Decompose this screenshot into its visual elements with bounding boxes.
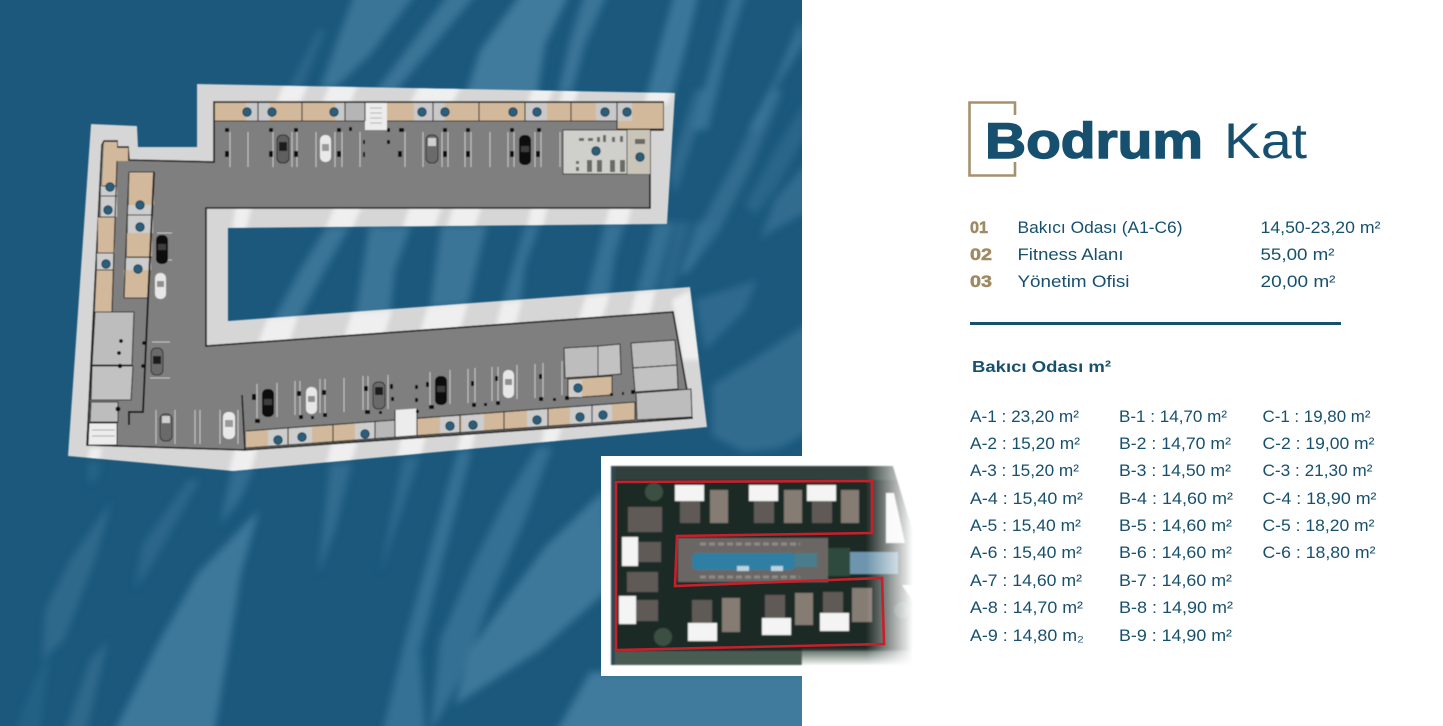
room areas column C xyxy=(1262,408,1377,562)
aerial trees xyxy=(645,483,910,646)
row 02 xyxy=(970,245,1335,264)
title second word: Kat xyxy=(1224,113,1307,169)
row 01: Bakıcı Odası (A1-C6) xyxy=(1018,218,1182,237)
row 01 xyxy=(970,218,1381,237)
lower arm parking lines xyxy=(257,361,562,418)
row 01: 01 xyxy=(970,218,988,237)
parking floor xyxy=(87,102,692,450)
room areas column C: C-6 : 18,80 m² xyxy=(1262,544,1376,562)
row 02: Fitness Alanı xyxy=(1018,245,1124,264)
aerial white roofs xyxy=(619,485,912,641)
room areas column C: C-2 : 19,00 m² xyxy=(1262,435,1375,453)
room areas column A: A-4 : 15,40 m² xyxy=(970,490,1084,508)
top arm columns xyxy=(225,127,541,157)
subheading: Bakıcı Odası m² xyxy=(972,359,1111,376)
left wing rooms xyxy=(88,142,154,445)
room areas column B: B-9 : 14,90 m² xyxy=(1119,627,1233,645)
fitness area and management office xyxy=(563,130,650,174)
row 03 xyxy=(970,272,1336,291)
plan border xyxy=(68,84,707,475)
room areas column C: C-4 : 18,90 m² xyxy=(1262,490,1377,508)
lower arm storage rooms xyxy=(246,402,635,448)
panel: white page area xyxy=(802,0,1443,726)
area summary list xyxy=(970,218,1381,291)
room areas column B: B-1 : 14,70 m² xyxy=(1119,408,1228,426)
room areas column A: A-8 : 14,70 m² xyxy=(970,599,1084,617)
row 02: 55,00 m² xyxy=(1260,245,1335,264)
room areas column A: A-6 : 15,40 m² xyxy=(970,544,1083,562)
top row storage rooms xyxy=(215,103,663,130)
inset: white frame for site aerial xyxy=(601,456,802,676)
lower arm cars xyxy=(262,370,514,417)
row 03: Yönetim Ofisi xyxy=(1018,272,1130,291)
room areas column B: B-8 : 14,90 m² xyxy=(1119,599,1234,617)
panel: blue leaf-shadow background xyxy=(0,0,812,726)
aerial pool deck xyxy=(678,538,898,582)
room areas column B xyxy=(1119,408,1234,645)
row 02: 02 xyxy=(970,245,992,264)
aerial red outline xyxy=(616,481,884,650)
lower arm columns xyxy=(252,374,635,423)
room areas column A: A-1 : 23,20 m² xyxy=(970,408,1080,426)
room areas column A xyxy=(970,408,1084,645)
aerial fades xyxy=(893,466,916,542)
room areas column B: B-6 : 14,60 m² xyxy=(1119,544,1233,562)
room areas column B: B-7 : 14,60 m² xyxy=(1119,572,1233,590)
room areas column A: A-7 : 14,60 m² xyxy=(970,572,1083,590)
room areas column C: C-5 : 18,20 m² xyxy=(1262,517,1375,535)
room areas column C: C-3 : 21,30 m² xyxy=(1262,462,1373,480)
floor plan xyxy=(68,84,707,475)
row 03: 20,00 m² xyxy=(1260,272,1336,291)
room areas column B: B-3 : 14,50 m² xyxy=(1119,462,1232,480)
top arm cars xyxy=(277,135,531,165)
row 03: 03 xyxy=(970,272,992,291)
room areas column B: B-4 : 14,60 m² xyxy=(1119,490,1234,508)
top arm parking lines xyxy=(230,132,560,167)
inset: site aerial photo xyxy=(611,466,916,666)
row 01: 14,50-23,20 m² xyxy=(1260,218,1381,237)
room areas column B: B-2 : 14,70 m² xyxy=(1119,435,1232,453)
left aisle cars and markings xyxy=(150,233,245,450)
lower arm right rooms xyxy=(564,340,692,420)
aerial houses xyxy=(627,500,843,623)
title: Bodrum xyxy=(985,113,1203,169)
room areas column A: A-9 : 14,80 m₂ xyxy=(970,627,1084,645)
room areas column A: A-5 : 15,40 m² xyxy=(970,517,1082,535)
room areas column A: A-3 : 15,20 m² xyxy=(970,462,1080,480)
room areas column A: A-2 : 15,20 m² xyxy=(970,435,1081,453)
icon: gold title bracket xyxy=(970,102,1015,176)
room areas column C: C-1 : 19,80 m² xyxy=(1262,408,1371,426)
room areas column B: B-5 : 14,60 m² xyxy=(1119,517,1233,535)
